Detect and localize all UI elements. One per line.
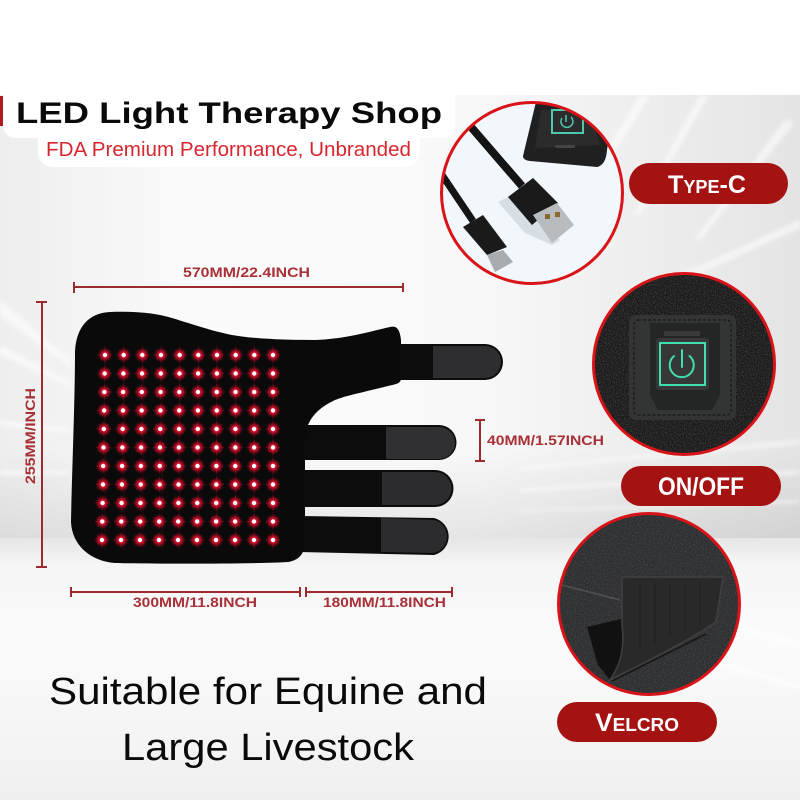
product: LED wrap [71, 312, 503, 564]
caption: Large Livestock [122, 727, 415, 769]
dimension: 570mm width [74, 264, 403, 293]
dimension: 300mm [71, 587, 300, 610]
Velcro label [557, 702, 717, 742]
LED grid [94, 345, 281, 550]
dimension: 570mm width: 570MM/22.4INCH [183, 264, 310, 280]
Type-C label: Type-C [668, 171, 746, 199]
subtitle panel [38, 138, 420, 167]
ON/OFF label [621, 466, 781, 506]
header: brand title [0, 93, 455, 167]
icon: power [660, 343, 705, 385]
dimension: 40mm: 40MM/1.57INCH [487, 432, 604, 448]
dimension: 300mm: 300MM/11.8INCH [133, 594, 257, 610]
strap 1 [395, 344, 503, 380]
caption: Suitable for Equine and [49, 671, 487, 713]
photo: power button [593, 273, 775, 455]
dimension: 180mm [306, 587, 452, 610]
USB-C plug [440, 172, 513, 272]
title text: LED Light Therapy Shop [16, 97, 442, 130]
dimension: 40mm [475, 420, 604, 461]
USB-A plug [465, 120, 574, 245]
ON/OFF label: ON/OFF [658, 473, 744, 501]
subtitle text: FDA Premium Performance, Unbranded [46, 139, 411, 161]
main panel [71, 312, 401, 564]
strap 2 [300, 425, 456, 460]
controller [523, 100, 610, 167]
dimension: 255mm height [22, 302, 47, 567]
title panel [3, 93, 455, 138]
photo: USB Type-C cable [440, 100, 622, 284]
photo: velcro [558, 513, 740, 695]
red accent bar [0, 96, 3, 126]
strap 3 [300, 470, 454, 507]
Velcro label: Velcro [595, 709, 679, 737]
Type-C label [629, 163, 788, 204]
strap 4 [300, 516, 449, 555]
dimension: 180mm: 180MM/11.8INCH [323, 594, 446, 610]
caption [49, 671, 487, 769]
dimension: 255mm height: 255MM/INCH [22, 388, 38, 484]
